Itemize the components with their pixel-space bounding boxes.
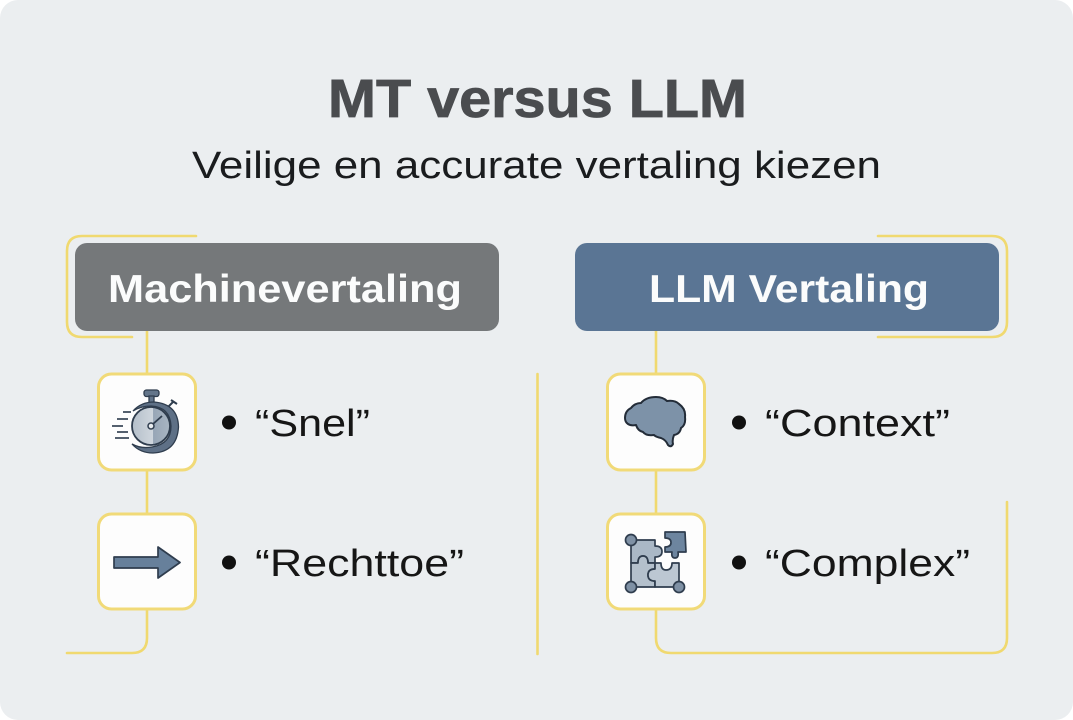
- bullet: [732, 556, 746, 570]
- connector lines: machine translation column: [67, 236, 196, 653]
- item: Snel: [98, 374, 370, 470]
- label: Context: “Context”: [765, 403, 950, 445]
- header: LLM Vertaling: LLM Vertaling: [649, 268, 929, 311]
- column divider: [536, 374, 539, 654]
- icon: arrow: [114, 547, 180, 578]
- connector lines: LLM column: [656, 236, 1007, 653]
- label: Complex: “Complex”: [765, 543, 970, 585]
- label: Snel: “Snel”: [255, 403, 370, 445]
- item: Context: [608, 374, 950, 470]
- header: Machinevertaling: [75, 243, 499, 331]
- item: Rechttoe: [98, 514, 464, 609]
- title: MT versus LLM: [328, 69, 747, 129]
- label: Rechttoe: “Rechttoe”: [255, 543, 464, 585]
- subtitle: Veilige en accurate vertaling kiezen: [192, 145, 881, 187]
- bullet: [222, 556, 236, 570]
- header: Machinevertaling: Machinevertaling: [108, 268, 462, 311]
- icon: brain: [625, 397, 685, 446]
- bullet: [222, 416, 236, 430]
- panel: LLM Vertaling: [575, 243, 999, 609]
- item: Complex: [608, 514, 970, 609]
- icon: puzzle: [626, 532, 686, 592]
- panel: Machinevertaling: [75, 243, 499, 609]
- bullet: [732, 416, 746, 430]
- header: LLM Vertaling: [575, 243, 999, 331]
- icon: stopwatch: [112, 390, 178, 453]
